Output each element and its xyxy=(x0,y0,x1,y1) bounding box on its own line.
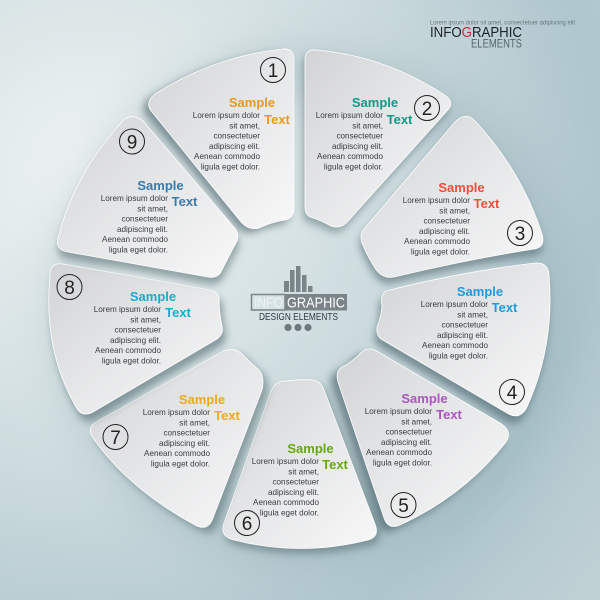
panel 3 xyxy=(361,116,543,277)
logo wordmark xyxy=(252,294,347,312)
panel 2: Lorem ipsum dolor xyxy=(316,111,383,120)
panel 3: consectetuer xyxy=(423,217,470,226)
panel 9: consectetuer xyxy=(121,215,168,224)
panel 2: consectetuer xyxy=(336,132,383,141)
panel 5 xyxy=(337,349,508,526)
panel 8: 8 xyxy=(64,278,75,299)
icon: bar chart xyxy=(284,266,312,292)
panel 9: adipiscing elit. xyxy=(117,225,168,234)
panel 7: Lorem ipsum dolor xyxy=(143,408,210,417)
panel 5: sit amet, xyxy=(401,417,432,426)
panel 6: consectetuer xyxy=(272,478,319,487)
logo subtitle: DESIGN ELEMENTS xyxy=(259,312,338,323)
panel 6: 6 xyxy=(242,514,252,535)
panel 5: Sample xyxy=(401,391,448,406)
panel 2: Text xyxy=(387,112,413,127)
panel 4: ligula eget dolor. xyxy=(429,352,488,360)
panel 6: Lorem ipsum dolor xyxy=(252,457,319,466)
panel 5: consectetuer xyxy=(385,428,432,437)
panel 1: adipiscing elit. xyxy=(209,142,260,151)
ring shadow xyxy=(75,70,545,540)
panel 7: Sample xyxy=(179,392,225,407)
panel 9: 9 xyxy=(127,132,137,154)
panel 6: Text xyxy=(322,457,349,472)
panel 4: consectetuer xyxy=(441,321,488,330)
panel 1: Sample xyxy=(229,95,275,110)
panel 6: adipiscing elit. xyxy=(268,488,319,497)
panel 8: sit amet, xyxy=(130,315,161,324)
panel 6: sit amet, xyxy=(288,467,319,476)
panel 8: Sample xyxy=(130,289,176,304)
panel 2 xyxy=(305,50,451,227)
top-right title block: Lorem ipsum dolor sit amet, consectetuer adipiscing elit xyxy=(430,20,575,26)
panel 2: sit amet, xyxy=(352,121,383,130)
panel 2: Sample xyxy=(352,95,398,110)
top-right title block: INFOGRAPHIC xyxy=(430,25,522,41)
panel 1: sit amet, xyxy=(229,121,260,130)
panel 3: Aenean commodo xyxy=(404,237,470,246)
panel 3: 3 xyxy=(515,224,525,245)
panel 9: ligula eget dolor. xyxy=(109,246,168,254)
logo wordmark: GRAPHIC xyxy=(287,294,345,312)
panel 7: Aenean commodo xyxy=(144,449,210,458)
panel 8 xyxy=(49,264,222,414)
center logo xyxy=(252,266,347,331)
panel 1: Lorem ipsum dolor xyxy=(193,111,260,120)
panel 9: sit amet, xyxy=(137,204,168,213)
panel 8: ligula eget dolor. xyxy=(102,356,161,366)
panel 1: Text xyxy=(264,112,291,127)
panel 8: Text xyxy=(165,305,192,320)
panel 7: 7 xyxy=(110,428,121,449)
panel 6: ligula eget dolor. xyxy=(260,508,319,518)
panel 8: Aenean commodo xyxy=(95,346,161,355)
panel 9 xyxy=(57,117,238,277)
panel 6: Aenean commodo xyxy=(253,498,319,507)
panel 7 xyxy=(90,349,263,527)
panel 4: Text xyxy=(492,300,518,315)
panel 4: Aenean commodo xyxy=(422,341,488,350)
panel 3: ligula eget dolor. xyxy=(411,248,470,256)
logo dots xyxy=(284,324,312,331)
panel 9: Text xyxy=(172,194,198,209)
panel 9: Sample xyxy=(137,178,184,193)
panel 8: Lorem ipsum dolor xyxy=(94,305,161,314)
panel 4 xyxy=(377,263,550,416)
panel 3: sit amet, xyxy=(439,206,470,215)
panel 5: Lorem ipsum dolor xyxy=(365,407,432,416)
panel 4: sit amet, xyxy=(457,310,488,319)
panel 5: ligula eget dolor. xyxy=(373,458,432,468)
logo wordmark: INFO xyxy=(254,294,283,312)
panel 5: Aenean commodo xyxy=(366,448,432,457)
top-right title block xyxy=(430,20,575,50)
panel 3: Text xyxy=(474,196,500,211)
panel 4: Sample xyxy=(457,284,503,299)
panel 1 xyxy=(149,49,294,229)
top-right title block: ELEMENTS xyxy=(471,36,522,50)
panel 2: 2 xyxy=(422,99,432,120)
panel 6: Sample xyxy=(287,441,334,456)
panel 8: consectetuer xyxy=(114,326,161,335)
panel 8: adipiscing elit. xyxy=(110,336,161,345)
panel 4: adipiscing elit. xyxy=(437,331,488,340)
panel 1: ligula eget dolor. xyxy=(201,162,260,172)
panel 3: adipiscing elit. xyxy=(419,227,470,236)
panel 5: adipiscing elit. xyxy=(381,438,432,447)
panel 7: ligula eget dolor. xyxy=(151,460,210,468)
panel 2: Aenean commodo xyxy=(317,152,383,161)
panel 9: Lorem ipsum dolor xyxy=(101,194,168,203)
panel 6 xyxy=(223,380,376,548)
panel 7: Text xyxy=(214,408,241,423)
panel 1: Aenean commodo xyxy=(194,152,260,161)
panel 7: adipiscing elit. xyxy=(159,439,210,448)
panel 7: consectetuer xyxy=(163,429,210,438)
panel 4: Lorem ipsum dolor xyxy=(421,300,488,309)
panel 3: Lorem ipsum dolor xyxy=(403,196,470,205)
panel 5: 5 xyxy=(398,496,409,517)
panel 7: sit amet, xyxy=(179,418,210,427)
panel 1: consectetuer xyxy=(213,132,260,141)
panel 4: 4 xyxy=(507,383,518,404)
panel 2: ligula eget dolor. xyxy=(324,162,383,172)
panel 9: Aenean commodo xyxy=(102,235,168,244)
panel 2: adipiscing elit. xyxy=(332,142,383,151)
panel 3: Sample xyxy=(438,180,485,195)
panel 1: 1 xyxy=(268,61,278,82)
panel 5: Text xyxy=(436,407,463,422)
